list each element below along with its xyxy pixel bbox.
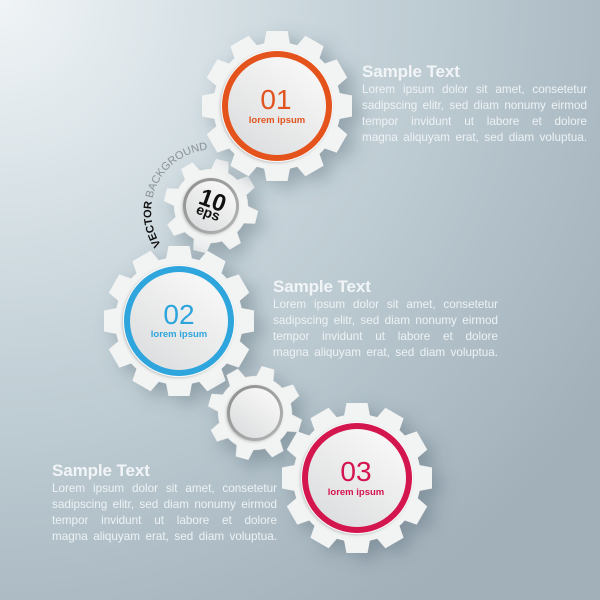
gear 01 [202, 31, 352, 181]
label: lorem ipsum: lorem ipsum [151, 329, 207, 340]
text block 01: sadipscing elitr, sed diam nonumy eirmod [362, 99, 587, 112]
label: lorem ipsum: lorem ipsum [328, 487, 384, 498]
text block 01: magna aliquyam erat, sed diam voluptua. [362, 131, 587, 144]
text block 01 [362, 62, 587, 144]
gear 02 [104, 246, 254, 396]
badge text: 10 eps: 10 [195, 184, 230, 218]
text block 02 [273, 277, 498, 359]
gear 03 [282, 403, 432, 553]
text block 02: Sample Text [273, 277, 371, 296]
text block 03: tempor invidunt ut labore et dolore [52, 514, 277, 527]
text block 02: magna aliquyam erat, sed diam voluptua. [273, 346, 498, 359]
text block 03: sadipscing elitr, sed diam nonumy eirmod [52, 498, 277, 511]
label: lorem ipsum: lorem ipsum [249, 115, 305, 126]
text block 03: Sample Text [52, 461, 150, 480]
text block 01: tempor invidunt ut labore et dolore [362, 115, 587, 128]
text block 01: Lorem ipsum dolor sit amet, consetetur [362, 83, 587, 96]
small gear: 10 eps [154, 149, 268, 263]
text block 03 [52, 461, 277, 543]
small gear: blank [197, 355, 313, 471]
text block 03: magna aliquyam erat, sed diam voluptua. [52, 530, 277, 543]
text block 02: Lorem ipsum dolor sit amet, consetetur [273, 298, 498, 311]
badge text: 10 eps: eps [194, 201, 223, 224]
curved label: vector background: VECTOR BACKGROUND [144, 142, 206, 249]
text block 02: tempor invidunt ut labore et dolore [273, 330, 498, 343]
number 01: 01 [260, 84, 292, 115]
number 03: 03 [340, 456, 372, 487]
text block 02: sadipscing elitr, sed diam nonumy eirmod [273, 314, 498, 327]
number 02: 02 [163, 299, 195, 330]
text block 01: Sample Text [362, 62, 460, 81]
text block 03: Lorem ipsum dolor sit amet, consetetur [52, 482, 277, 495]
